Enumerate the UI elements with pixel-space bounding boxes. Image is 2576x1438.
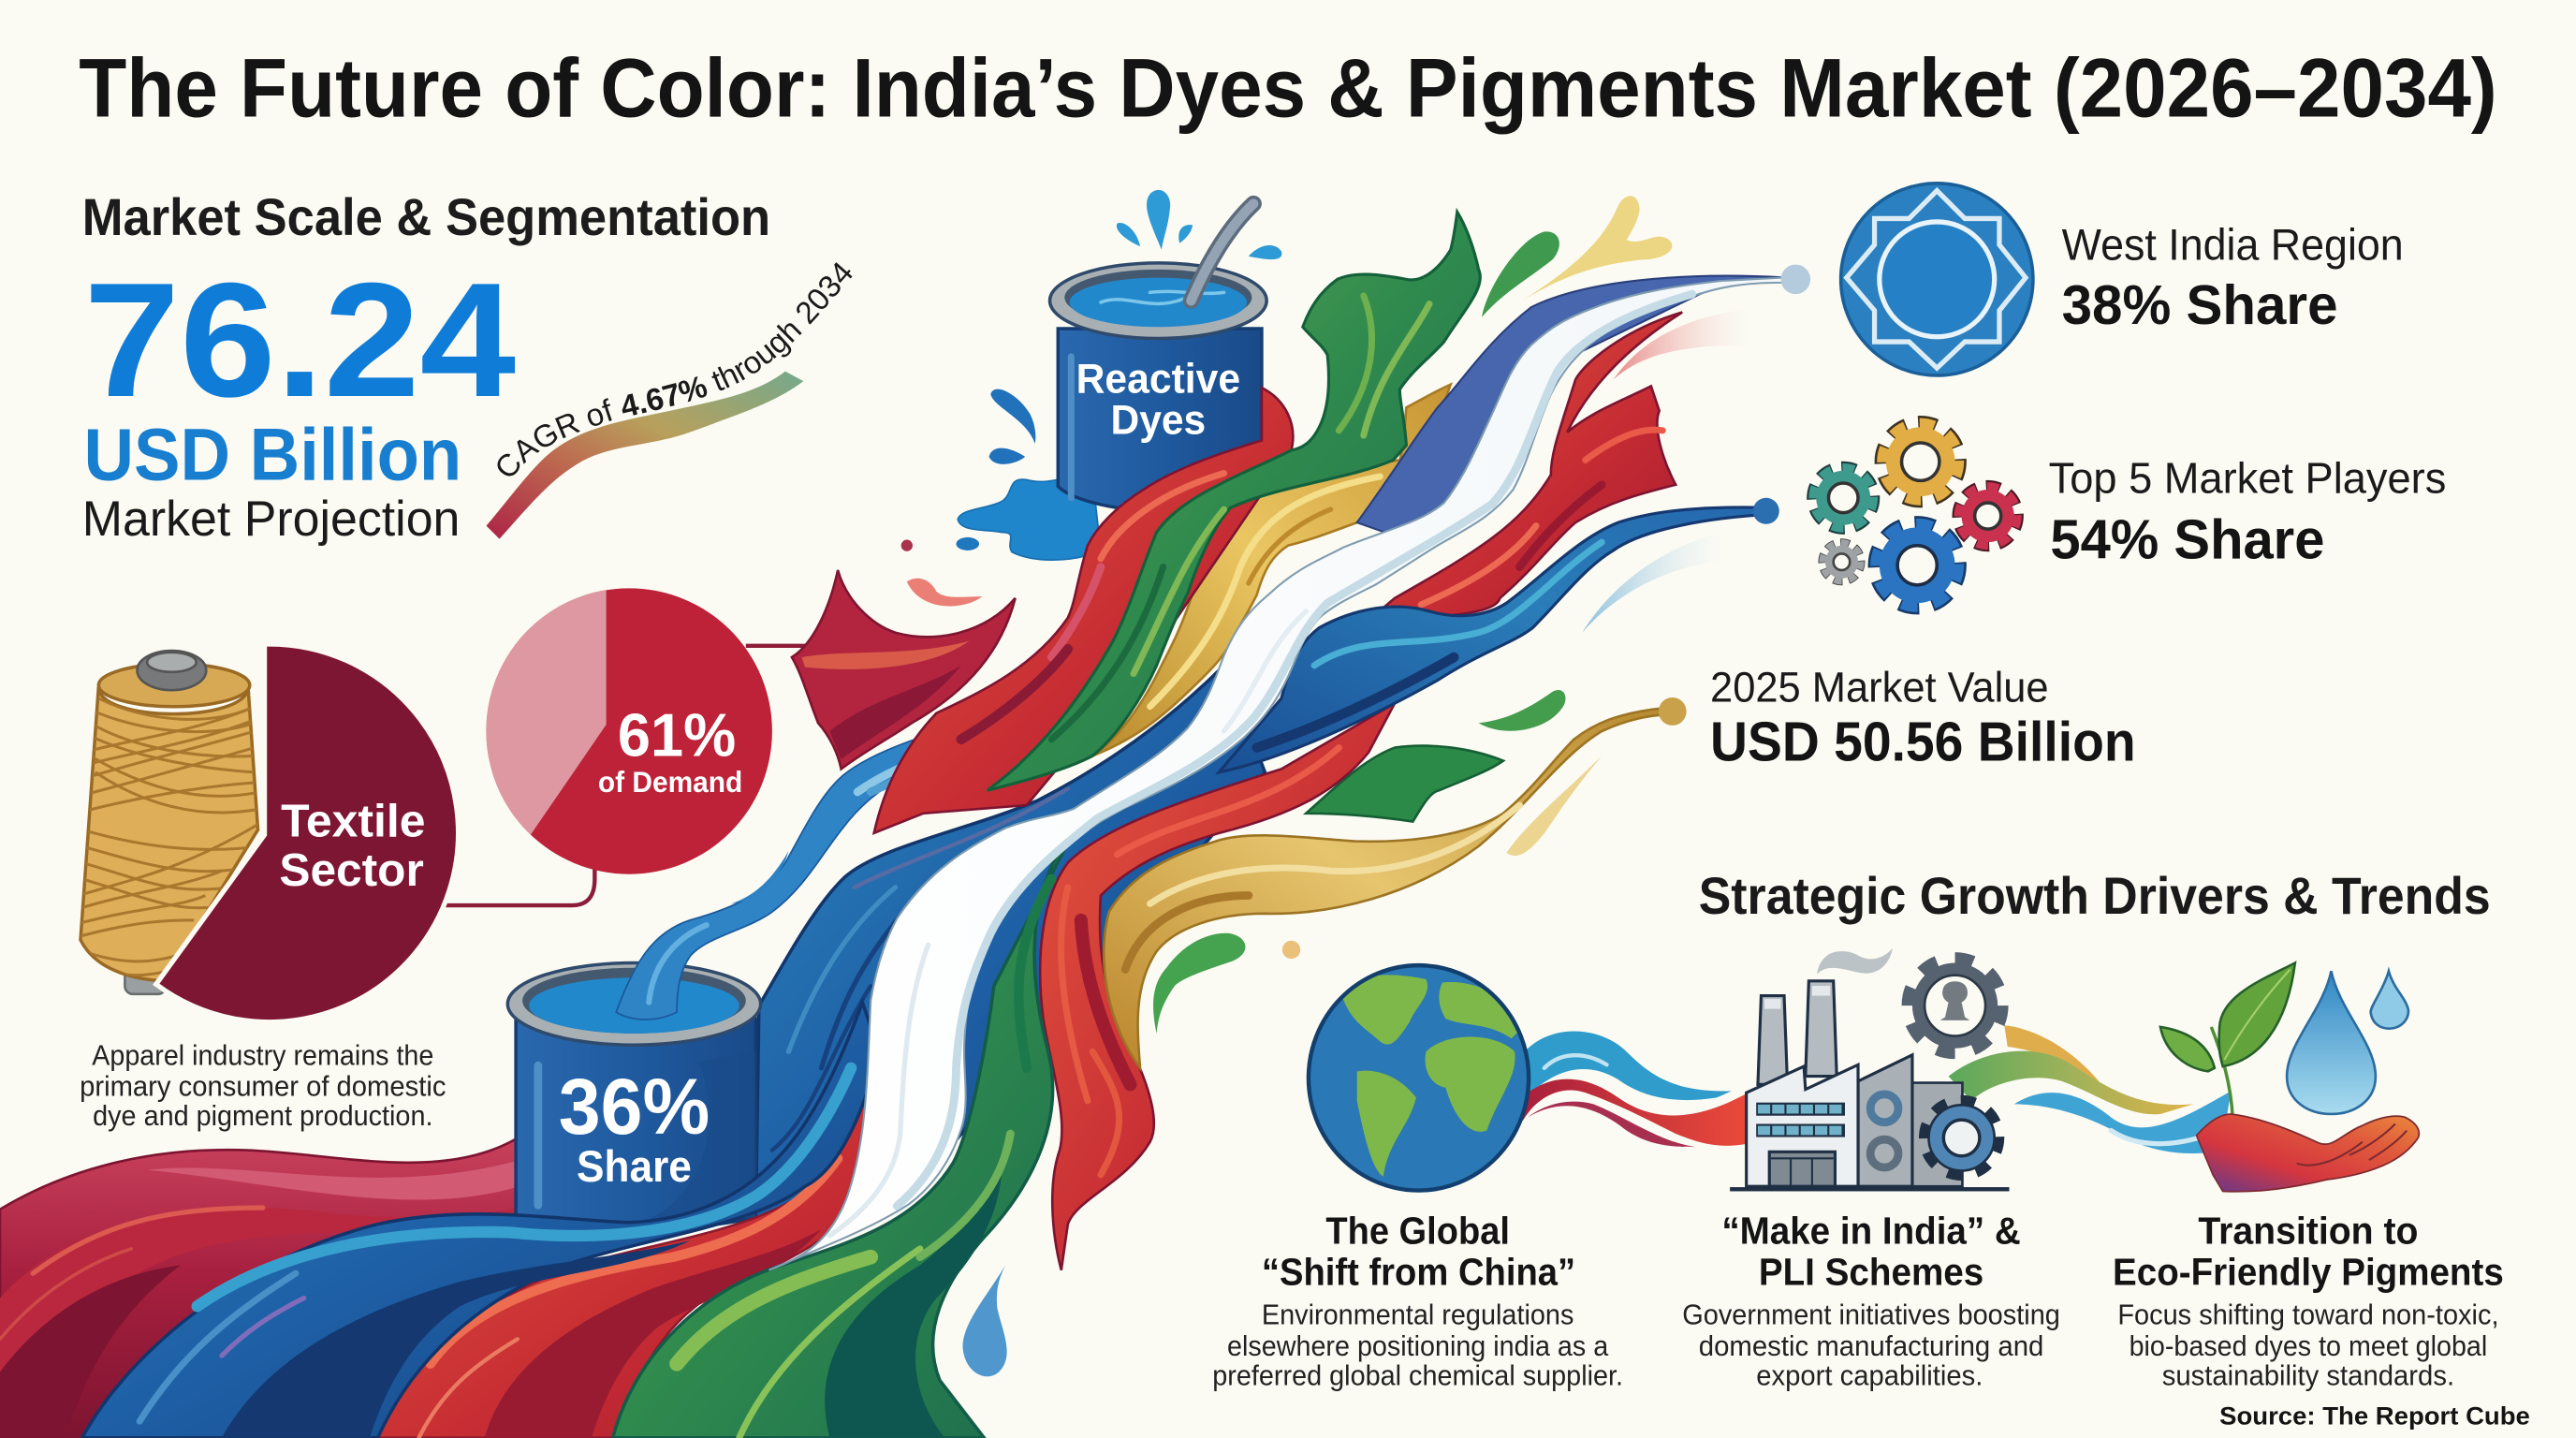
gear: grey (1822, 543, 1861, 580)
icon: eco hand with plant and water drops (2160, 962, 2419, 1192)
CAGR label: CAGR of 4.67% through 2034 (498, 262, 852, 476)
ribbon: crimson strand wrapping can (874, 388, 1293, 833)
text: 2025 market value: USD 50.56 Billion (1710, 711, 2136, 773)
text: apparel industry note: dye and pigment production. (93, 1099, 432, 1132)
label: Reactive (1076, 355, 1240, 402)
dot: west india connector (1781, 265, 1810, 294)
driver three: eco friendly pigments: sustainability standards. (2162, 1359, 2454, 1392)
driver one: shift from china (1212, 1210, 1623, 1392)
smoke (1817, 948, 1893, 975)
driver one: shift from china: elsewhere positioning india as a (1227, 1329, 1609, 1362)
dot: top five connector (1753, 498, 1779, 524)
pie: textile sector (156, 644, 459, 1022)
text: apparel industry note (80, 1038, 446, 1132)
big drop (2287, 971, 2376, 1114)
ribbon: pour stream and light blue strand (616, 703, 1081, 1020)
unit: USD Billion (84, 413, 461, 495)
stir stick (1191, 204, 1253, 301)
ribbons: factory to hand (1949, 1025, 2231, 1153)
ribbon: white strand (768, 278, 1782, 1270)
text: apparel industry note: primary consumer of domestic (80, 1070, 446, 1103)
driver one: shift from china: “Shift from China” (1262, 1250, 1575, 1293)
text: top five players (2049, 454, 2446, 571)
building blocks (1912, 1083, 1962, 1186)
small gears (1870, 1094, 1898, 1123)
text: 2025 market value (1710, 663, 2136, 773)
splash drops (1147, 190, 1170, 250)
decorative splashes near ribbons (901, 196, 1749, 1376)
gear: gold (1881, 423, 1959, 500)
small drop (2371, 971, 2408, 1029)
driver two: make in india: export capabilities. (1756, 1359, 1983, 1392)
driver one: shift from china: preferred global chemical supplier. (1212, 1359, 1623, 1392)
ribbon: upper red with flap (1364, 312, 1682, 624)
connector lines (440, 646, 809, 905)
driver two: make in india: Government initiatives boosting (1682, 1299, 2060, 1331)
heading: strategic growth drivers: Strategic Growth Drivers & Trends (1699, 867, 2491, 925)
value: 61% (618, 700, 736, 769)
projection label: Market Projection (82, 492, 460, 547)
can: reactive dyes: Dyes (1110, 396, 1206, 443)
ribbon: periwinkle strand (1357, 276, 1788, 542)
icon: west india medallion (1841, 183, 2033, 375)
puddle (958, 476, 1101, 560)
text: apparel industry note: Apparel industry remains the (92, 1038, 433, 1071)
ribbon: green lower band (613, 829, 1075, 1438)
ribbon streaks: navy strand (772, 788, 1068, 1151)
label: textile: Textile (281, 796, 426, 846)
driver three: eco friendly pigments (2113, 1210, 2504, 1392)
gear: blue (1875, 523, 1959, 608)
driver two: make in india: “Make in India” & (1721, 1210, 2021, 1253)
driver three: eco friendly pigments: bio-based dyes to meet global (2130, 1329, 2487, 1362)
ribbon: navy strand behind can (755, 666, 1265, 1225)
emblem gear (1909, 960, 2001, 1051)
driver two: make in india: domestic manufacturing and (1699, 1329, 2043, 1362)
ribbon: bottom left crimson band (0, 1137, 526, 1438)
caption: Share (577, 1142, 692, 1192)
door (1769, 1152, 1835, 1186)
big leaf (2219, 962, 2295, 1066)
text: west india region: 38% Share (2062, 273, 2338, 336)
driver one: shift from china: Environmental regulations (1262, 1299, 1573, 1331)
CAGR curved text path (509, 274, 855, 481)
driver two: make in india: PLI Schemes (1759, 1250, 1983, 1293)
ribbon: upper gold strand (1092, 385, 1451, 756)
value: 36% (559, 1063, 710, 1151)
ribbon streaks: upper gold (1150, 477, 1380, 707)
windows (1756, 1103, 1845, 1116)
icon: factory (1730, 948, 2009, 1191)
heading: market scale and segmentation: Market Scale & Segmentation (82, 188, 770, 246)
hand (2197, 1114, 2419, 1192)
can: reactive dyes (956, 190, 1281, 560)
chimneys (1758, 981, 1837, 1084)
blue gear (1925, 1102, 1998, 1174)
ribbon: crimson flap (792, 570, 1016, 769)
driver one: shift from china: The Global (1325, 1210, 1510, 1253)
text: west india region: West India Region (2062, 220, 2404, 270)
text: top five players: 54% Share (2050, 508, 2324, 571)
gear: red (1958, 487, 2017, 546)
CAGR ribbon (487, 372, 803, 539)
ribbon: lower gold strand (1104, 708, 1667, 1068)
dot: 2025 value connector (1659, 697, 1687, 726)
ribbon: upper blue strand (1219, 507, 1771, 772)
icon: five gears (1813, 423, 2017, 608)
driver three: eco friendly pigments: Focus shifting toward non-toxic, (2117, 1299, 2499, 1331)
gear: teal (1813, 467, 1874, 528)
driver three: eco friendly pigments: Transition to (2198, 1210, 2419, 1253)
stem (2211, 1027, 2232, 1117)
label: sector: Sector (279, 845, 424, 896)
big number: 76.24 (84, 249, 516, 431)
icon: globe (1309, 965, 1529, 1191)
caption: of Demand (598, 765, 742, 799)
driver two: make in india (1682, 1210, 2060, 1392)
ground line (1730, 1187, 2009, 1191)
ribbon: front blue band (82, 1003, 879, 1438)
driver three: eco friendly pigments: Eco-Friendly Pigments (2113, 1250, 2504, 1293)
text: 2025 market value: 2025 Market Value (1710, 663, 2049, 711)
ribbon: green strand with flag (988, 212, 1480, 790)
pie: 61 percent of demand (486, 588, 772, 874)
small leaf (2160, 1027, 2215, 1071)
panel: market scale (82, 188, 852, 547)
text: top five players: Top 5 Market Players (2049, 454, 2446, 503)
ribbon: lower front red orange band (378, 1068, 920, 1438)
text: west india region (2062, 220, 2404, 336)
can: 36 percent share (507, 962, 761, 1228)
ribbons: globe to factory (1519, 1032, 1748, 1147)
icon: thread spool (79, 651, 263, 994)
ribbon: lower red with tail (1040, 703, 1395, 1270)
source credit: Source: The Report Cube (2219, 1401, 2530, 1431)
